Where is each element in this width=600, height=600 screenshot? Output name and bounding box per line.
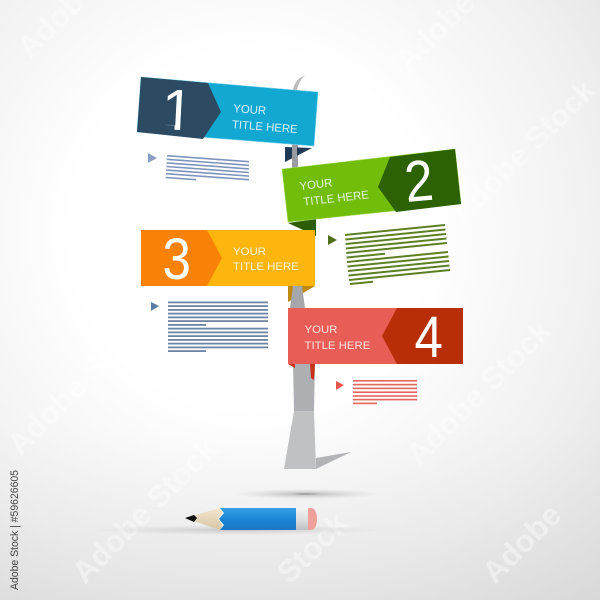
- paper tree trunk: [284, 75, 351, 469]
- step 3 text block: [151, 302, 268, 352]
- watermarks: Adobe Stock: [399, 313, 558, 472]
- step 2 title: YOUR: [299, 177, 333, 193]
- step 1 title: TITLE HERE: [232, 119, 298, 136]
- step 2 banner: [282, 148, 461, 222]
- step 4 title: YOUR: [304, 324, 337, 336]
- step 4 banner: [288, 305, 463, 370]
- step 2 text block: [328, 225, 450, 284]
- step 1 number: 1: [160, 77, 195, 144]
- step 3 title: TITLE HERE: [233, 261, 299, 273]
- watermarks: Adobe Stock: [40, 64, 199, 223]
- watermarks: Stock: [270, 505, 355, 590]
- step 3 fold: [288, 286, 315, 302]
- step 2 fold: [288, 219, 316, 236]
- step 4 fold: [288, 364, 315, 380]
- step 1 title: [232, 103, 300, 136]
- step 1 fold: [285, 147, 312, 162]
- step 4 title: [304, 324, 371, 352]
- floor shading: [0, 430, 600, 600]
- watermarks: Adobe: [475, 497, 568, 590]
- step 3 banner: [141, 227, 315, 292]
- step 4 text block: [336, 380, 417, 404]
- step 3 title: [233, 246, 299, 273]
- watermarks: Adobe Stock: [248, 265, 407, 424]
- step 4 title: TITLE HERE: [304, 340, 371, 352]
- pole below step 3: [290, 286, 305, 308]
- step 1 title: YOUR: [233, 103, 267, 118]
- vertical stock credit text: Adobe Stock | #59626605: [9, 470, 21, 590]
- watermarks: Adobe Stock: [0, 303, 159, 462]
- ground shadow: [234, 489, 378, 499]
- step 2 number: 2: [402, 148, 436, 215]
- step 3 title: YOUR: [233, 246, 266, 258]
- step 2 title: [299, 173, 370, 209]
- pole behind step 1: [292, 145, 297, 170]
- step 3 number: 3: [162, 227, 191, 292]
- watermarks: Adobe Stock: [443, 72, 600, 231]
- watermarks: Adobe Stock: [65, 431, 224, 590]
- step 1 text block: [148, 153, 249, 180]
- step 1 banner: [137, 77, 318, 146]
- step 2 title: TITLE HERE: [303, 189, 370, 209]
- pencil: [93, 508, 383, 535]
- step 4 number: 4: [414, 305, 443, 370]
